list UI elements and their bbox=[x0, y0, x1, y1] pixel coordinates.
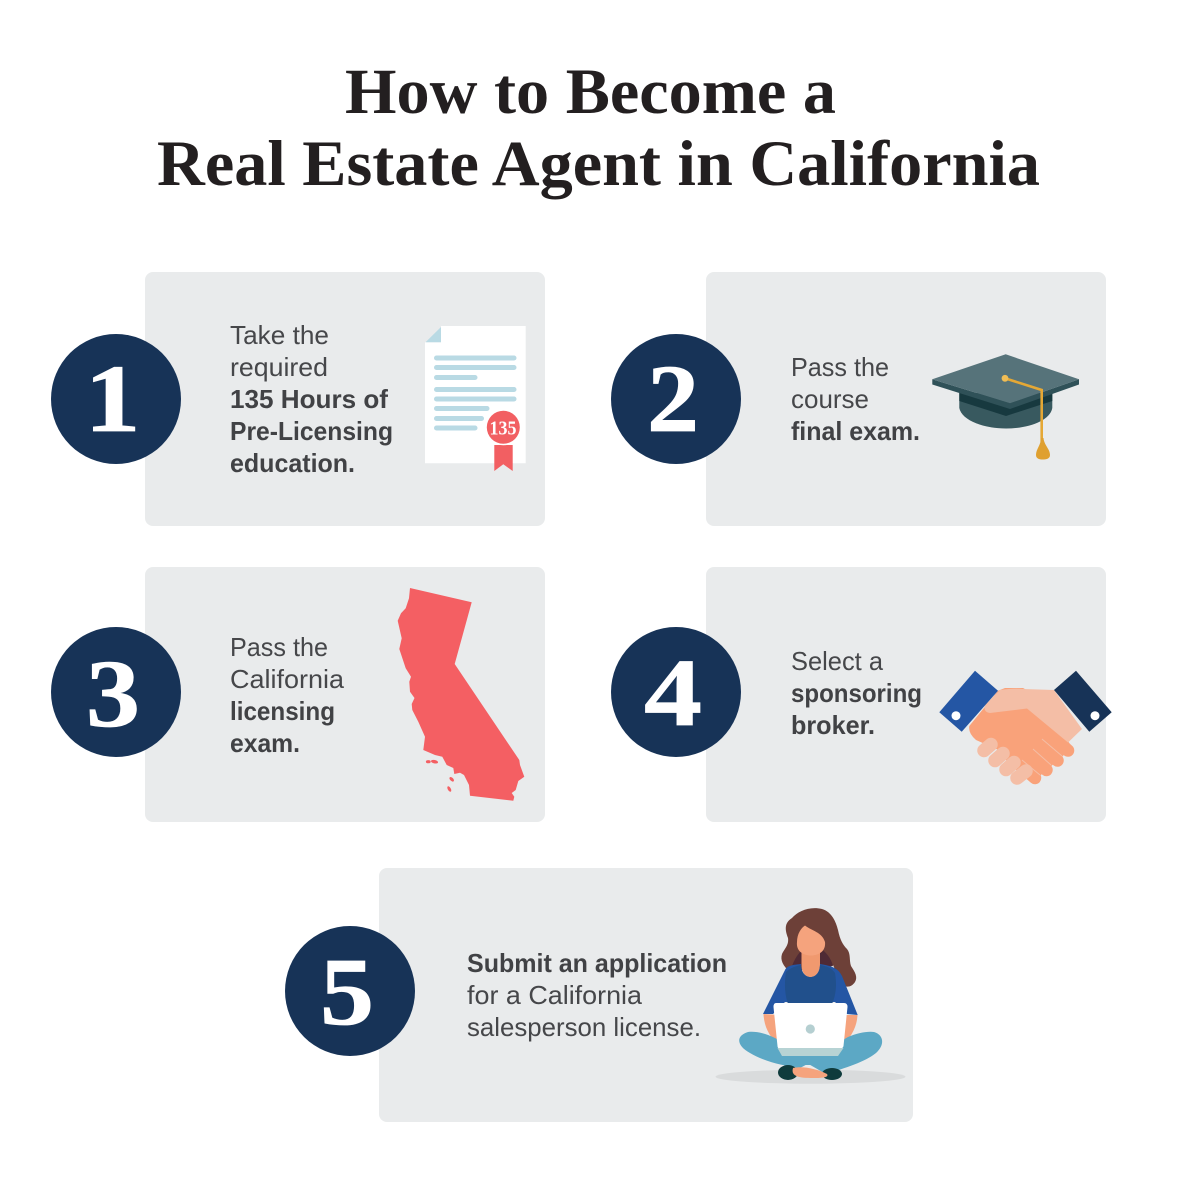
icon: graduation cap bbox=[932, 354, 1079, 460]
title: Real Estate Agent in California bbox=[157, 128, 1040, 200]
step 3 number badge: 3 bbox=[86, 640, 140, 747]
step 2 number badge: 2 bbox=[647, 345, 699, 452]
title: How to Become a bbox=[345, 56, 836, 128]
step 5 number badge: 5 bbox=[320, 938, 374, 1045]
step 2 number badge bbox=[611, 334, 741, 464]
step 5 text bbox=[467, 948, 727, 1042]
step 5 text: salesperson license. bbox=[467, 1012, 701, 1042]
icon: California map bbox=[398, 588, 524, 801]
step 1 text bbox=[230, 320, 393, 478]
step 3 text: California bbox=[230, 664, 345, 694]
step 4 text: broker. bbox=[791, 710, 875, 740]
icon: handshake bbox=[939, 671, 1112, 781]
step 3 text bbox=[230, 632, 345, 758]
step 3 text: Pass the bbox=[230, 632, 328, 662]
panel: step 4 bbox=[611, 567, 1112, 822]
step 5 text: for a California bbox=[467, 980, 643, 1010]
step 5 text: Submit an application bbox=[467, 948, 727, 978]
step 2 text: course bbox=[791, 384, 869, 414]
step 3 text: licensing bbox=[230, 696, 335, 726]
title bbox=[157, 56, 1040, 200]
step 4 number badge: 4 bbox=[644, 639, 702, 746]
step 3 number badge bbox=[51, 627, 181, 757]
step 2 text: Pass the bbox=[791, 352, 889, 382]
icon: certificate document: 135 bbox=[490, 418, 516, 440]
step 2 text bbox=[791, 352, 920, 446]
step 2 text: final exam. bbox=[791, 416, 920, 446]
step 5 number badge bbox=[285, 926, 415, 1056]
step 1 text: required bbox=[230, 352, 328, 382]
step 4 number badge bbox=[611, 627, 741, 757]
step 4 text: sponsoring bbox=[791, 678, 922, 708]
step 1 text: Take the bbox=[230, 320, 329, 350]
step 1 text: education. bbox=[230, 448, 355, 478]
panel: step 1 bbox=[51, 272, 545, 526]
step 3 text: exam. bbox=[230, 728, 300, 758]
icon: certificate document bbox=[425, 326, 526, 471]
icon: woman with laptop bbox=[716, 908, 906, 1084]
step 1 number badge bbox=[51, 334, 181, 464]
step 1 text: Pre-Licensing bbox=[230, 416, 393, 446]
step 4 text: Select a bbox=[791, 646, 884, 676]
step 1 number badge: 1 bbox=[84, 345, 140, 452]
step 1 text: 135 Hours of bbox=[230, 384, 388, 414]
panel: step 3 bbox=[51, 567, 545, 822]
panel: step 5 bbox=[285, 868, 913, 1122]
panel: step 2 bbox=[611, 272, 1106, 526]
step 4 text bbox=[791, 646, 922, 740]
